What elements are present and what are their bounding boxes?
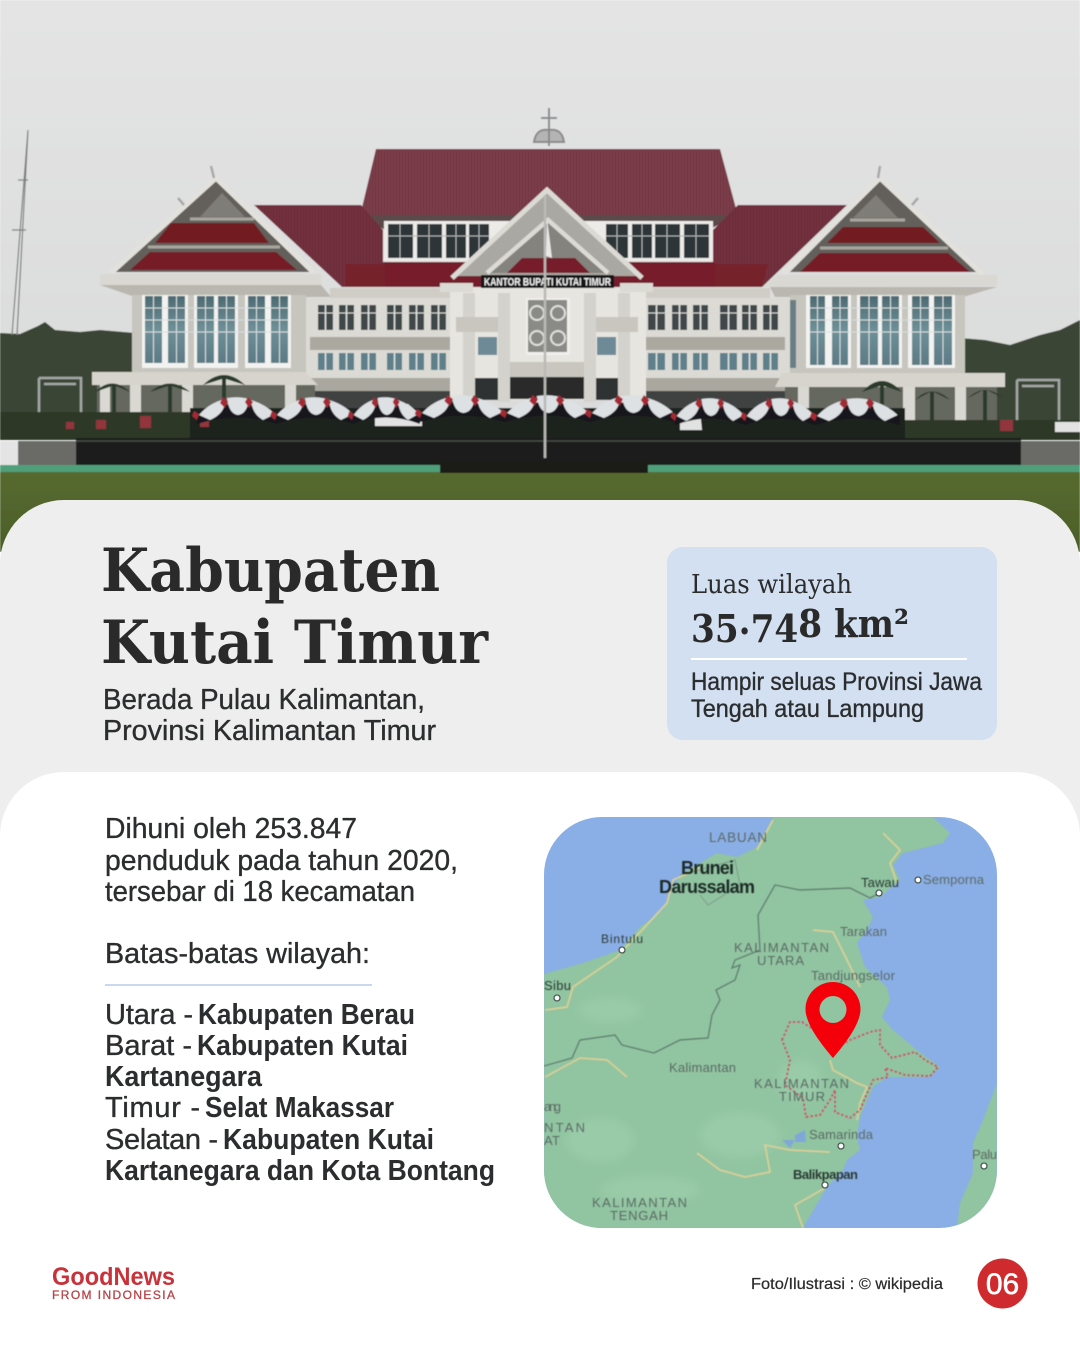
- central portico: [440, 190, 653, 402]
- red garden accents: [66, 416, 1013, 431]
- population text: tersebar di 18 kecamatan: [105, 876, 415, 908]
- page number badge: 06: [986, 1268, 1019, 1301]
- map of Kalimantan: [544, 817, 997, 1228]
- population text: [105, 813, 458, 908]
- area value: 35: [691, 606, 739, 651]
- map labels: KALIMANTAN: [734, 940, 830, 955]
- map labels: Brunei: [681, 858, 734, 878]
- borders heading: Batas-batas wilayah:: [105, 938, 370, 970]
- map labels: Bintulu: [601, 932, 643, 946]
- grey title panel: [0, 500, 1080, 1350]
- borders list: Utara -: [105, 999, 193, 1031]
- area info card: [667, 547, 997, 740]
- map labels: Sibu: [544, 978, 571, 993]
- map labels: Samarinda: [809, 1127, 874, 1142]
- borders list: Kabupaten Kutai: [223, 1124, 434, 1156]
- map labels: Palu: [972, 1147, 997, 1162]
- ground floor bands: [92, 372, 1005, 387]
- antenna tower: [12, 130, 28, 335]
- area value: 8 km²: [798, 601, 909, 646]
- palm trees: [95, 375, 1003, 420]
- green court strip: [0, 465, 1080, 472]
- subtitle: Provinsi Kalimantan Timur: [103, 715, 436, 747]
- left wing façade: [132, 295, 306, 375]
- area comparison: [691, 668, 982, 723]
- subtitle: Berada Pulau Kalimantan,: [103, 684, 425, 716]
- map labels: Tawau: [861, 875, 899, 890]
- middle façades: [306, 298, 456, 395]
- flag platform: [440, 462, 648, 473]
- country border: [544, 885, 880, 1066]
- location pin: [806, 982, 860, 1058]
- sky: [0, 0, 1080, 430]
- Kutai Timur dotted boundary: [782, 1022, 938, 1118]
- logo: GoodNews from Indonesia: GoodNews: [52, 1263, 175, 1291]
- roof ridge soffit: [360, 215, 738, 230]
- title: [101, 536, 489, 678]
- area value: 74: [751, 606, 798, 651]
- borders list: Kartanegara dan Kota Bontang: [105, 1155, 495, 1187]
- carved central panel: [526, 298, 570, 355]
- borders list: Selat Makassar: [205, 1092, 394, 1124]
- white content panel: [0, 772, 1080, 1350]
- borders list: Selatan -: [105, 1124, 218, 1156]
- lake: [782, 1130, 806, 1148]
- flagpole: [544, 195, 546, 458]
- garden hedge: [0, 412, 200, 440]
- upper roof: [360, 149, 738, 216]
- area comparison: Tengah atau Lampung: [691, 695, 924, 723]
- lighter terrain: [578, 1010, 810, 1193]
- map labels: LABUAN: [709, 830, 768, 845]
- map labels: KALIMANTAN: [754, 1076, 850, 1091]
- map labels: Kalimantan: [669, 1060, 736, 1075]
- map labels: Balikpapan: [793, 1167, 858, 1182]
- lower façade connecting bands: [330, 288, 450, 298]
- title: Kutai Timur: [101, 608, 489, 678]
- Sulawesi land: [957, 1083, 997, 1228]
- cars: [375, 404, 1080, 432]
- grass: [0, 472, 1080, 552]
- area value: .: [739, 598, 751, 643]
- retaining walls: [18, 441, 78, 465]
- area label: Luas wilayah: [691, 570, 852, 600]
- map labels: ang: [544, 1099, 561, 1114]
- borders list: Barat -: [105, 1030, 192, 1062]
- map labels: UTARA: [757, 953, 805, 968]
- logo: GoodNews from Indonesia: [52, 1263, 175, 1302]
- black fence: [76, 438, 1021, 466]
- map labels: NTAN: [544, 1120, 586, 1135]
- decorative bunting canopies: [192, 395, 900, 425]
- photo credit: Foto/Ilustrasi : © wikipedia: [751, 1276, 943, 1293]
- map labels: KALIMANTAN: [592, 1195, 688, 1210]
- borders list: Timur -: [105, 1092, 200, 1124]
- map labels: Tandjungselor: [811, 968, 896, 983]
- borders list: Kartanegara: [105, 1061, 263, 1093]
- map labels: Darussalam: [659, 877, 755, 897]
- map labels: Tarakan: [840, 924, 887, 939]
- building sign: [481, 275, 614, 288]
- background trees: [0, 320, 1080, 440]
- borders list: [105, 999, 495, 1187]
- land mass: [544, 817, 950, 1228]
- photo: Kantor Bupati Kutai Timur building: [0, 0, 1080, 552]
- title: Kabupaten: [101, 536, 440, 606]
- right wing façade: [786, 295, 965, 375]
- city dots: [554, 877, 987, 1188]
- left wing gable: [100, 166, 331, 297]
- central portico: KANTOR BUPATI KUTAI TIMUR: [484, 276, 611, 288]
- sea: [544, 817, 997, 1228]
- map labels: Semporna: [923, 872, 985, 887]
- Brunei outline: [680, 860, 740, 905]
- map labels: TIMUR: [779, 1089, 826, 1104]
- borders list: Kabupaten Berau: [198, 999, 415, 1031]
- map labels: AT: [544, 1133, 561, 1148]
- population text: penduduk pada tahun 2020,: [105, 845, 458, 877]
- provincial and coastal lines: [545, 820, 900, 1228]
- side roofs: [254, 205, 460, 287]
- page number badge: [978, 1258, 1028, 1308]
- right wing gable: [762, 166, 997, 297]
- upper window band: [384, 221, 713, 261]
- area comparison: Hampir seluas Provinsi Jawa: [691, 668, 982, 696]
- map labels: [544, 830, 997, 1223]
- white net at far left: [0, 441, 18, 466]
- roof crown ornament: [534, 108, 564, 146]
- population text: Dihuni oleh 253.847: [105, 813, 357, 845]
- truss gates: [39, 378, 1059, 425]
- map labels: TENGAH: [610, 1208, 669, 1223]
- logo: GoodNews from Indonesia: FROM INDONESIA: [52, 1288, 175, 1302]
- borders list: Kabupaten Kutai: [197, 1030, 408, 1062]
- subtitle: [103, 684, 436, 747]
